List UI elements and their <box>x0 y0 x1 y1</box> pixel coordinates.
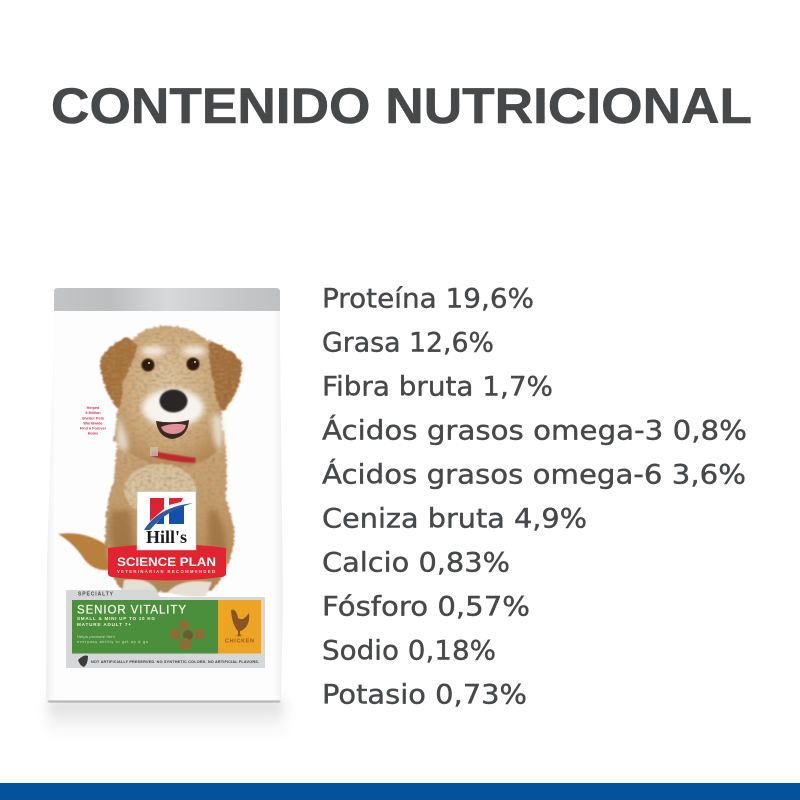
bag shadow <box>48 700 284 738</box>
phosphorus: Fósforo 0,57% <box>322 592 530 622</box>
calcium: Calcio 0,83% <box>322 548 510 578</box>
helped pets text: Helped <box>87 406 100 410</box>
red collar <box>151 451 196 463</box>
hill's logo <box>137 492 196 550</box>
left eye <box>142 358 154 372</box>
helped pets text <box>80 406 107 436</box>
crude fibre: Fibra bruta 1,7% <box>322 372 553 402</box>
crude ash: Ceniza bruta 4,9% <box>322 504 587 534</box>
helped pets text: Shelter Pets <box>82 416 104 420</box>
product bag <box>46 288 284 738</box>
fat: Grasa 12,6% <box>322 328 494 358</box>
red science plan banner: VETERINARIAN RECOMMENDED <box>117 569 215 574</box>
white muzzle <box>142 389 204 427</box>
right ear <box>209 340 242 412</box>
collar buckle <box>150 447 158 456</box>
dog body <box>105 430 234 592</box>
specialty label panel: SMALL & MINI UP TO 10 KG <box>77 616 155 621</box>
nutrient list <box>322 284 747 710</box>
darker chest shading <box>110 510 226 556</box>
green panel <box>72 600 218 654</box>
left ear <box>100 337 138 410</box>
silver top band <box>54 288 280 311</box>
kibble <box>170 620 204 650</box>
dog body and head fur <box>100 326 242 592</box>
mouth <box>156 420 189 439</box>
bag body <box>46 288 283 702</box>
bag bottom edge <box>48 700 280 702</box>
specialty label panel: with <box>237 634 243 638</box>
nose <box>160 390 188 412</box>
eye highlights <box>148 361 196 364</box>
specialty label panel: everyday ability to get up & go <box>77 640 148 644</box>
helped pets text: Worldwide <box>83 422 103 426</box>
specialty label panel: CHICKEN <box>225 638 254 644</box>
protein: Proteína 19,6% <box>322 284 534 314</box>
red science plan banner <box>108 544 226 580</box>
dog tail <box>58 533 110 570</box>
potassium: Potasio 0,73% <box>322 680 527 710</box>
title: CONTENIDO NUTRICIONAL <box>51 77 752 134</box>
sodium: Sodio 0,18% <box>322 636 496 666</box>
right eye <box>186 358 200 370</box>
leaf icon <box>78 656 88 667</box>
specialty label panel <box>66 590 265 668</box>
helped pets text: Find a Forever <box>80 426 107 430</box>
helped pets text: 9 Million <box>85 411 101 415</box>
pale chest fur <box>124 464 196 516</box>
white neck fur <box>116 415 224 452</box>
blue footer bar <box>0 783 800 800</box>
specialty label panel: Helps promote their <box>77 635 116 639</box>
orange chicken panel <box>218 600 261 654</box>
hill's logo: Hill's <box>146 527 187 547</box>
helped pets text: Home <box>88 432 98 436</box>
dog head <box>114 326 224 467</box>
chicken icon <box>231 610 249 636</box>
omega-6: Ácidos grasos omega-6 3,6% <box>322 458 746 490</box>
eyebrows <box>141 346 206 356</box>
omega-3: Ácidos grasos omega-3 0,8% <box>322 414 747 446</box>
specialty label panel: SENIOR VITALITY <box>77 604 186 616</box>
specialty label panel: MATURE ADULT 7+ <box>77 622 131 627</box>
dog paws <box>122 579 212 596</box>
specialty label panel: SPECIALTY <box>78 592 114 598</box>
red science plan banner: SCIENCE PLAN <box>117 557 216 569</box>
tongue <box>161 424 186 434</box>
specialty label panel: NOT ARTIFICIALLY PRESERVED. NO SYNTHETIC COLORS. NO ARTIFICIAL FLAVORS. <box>91 660 259 664</box>
dog illustration <box>58 326 242 596</box>
